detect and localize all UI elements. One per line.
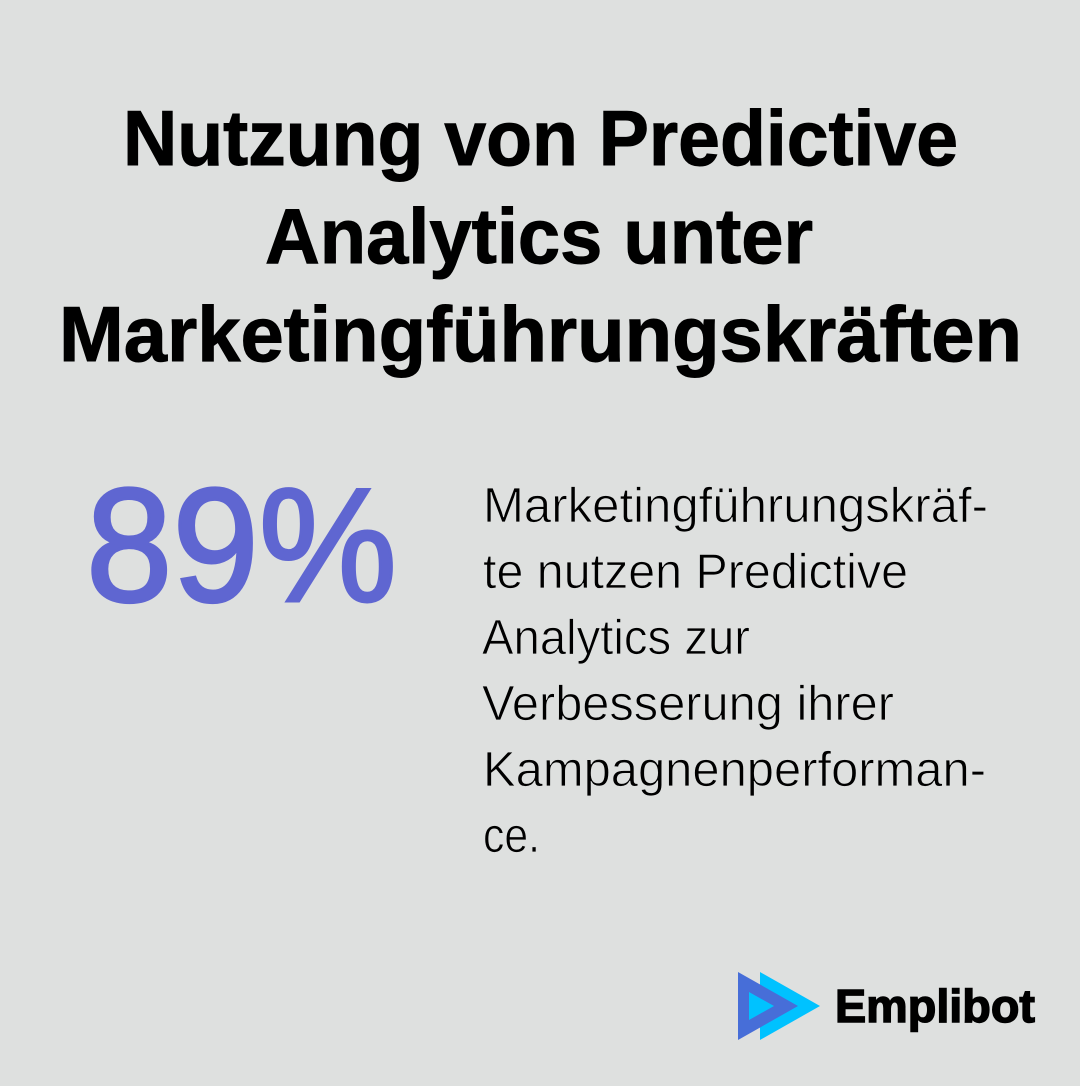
description text: Verbesserung ihrer <box>482 677 894 731</box>
title <box>59 94 1022 378</box>
icon: play triangles <box>738 972 820 1040</box>
logo: Emplibot <box>738 972 1035 1040</box>
title: Analytics unter <box>265 192 813 280</box>
description text: te nutzen Predictive <box>483 545 908 599</box>
description text: Marketingführungskräf- <box>483 479 988 533</box>
big statistic: 89%: 89% <box>86 455 397 636</box>
description text: ce. <box>483 809 540 863</box>
title: Marketingführungskräften <box>59 290 1022 378</box>
title: Nutzung von Predictive <box>123 94 958 182</box>
wordmark: Emplibot <box>835 980 1035 1032</box>
description text: Analytics zur <box>482 611 750 665</box>
description text <box>482 479 988 863</box>
description text: Kampagnenperforman- <box>483 743 986 797</box>
